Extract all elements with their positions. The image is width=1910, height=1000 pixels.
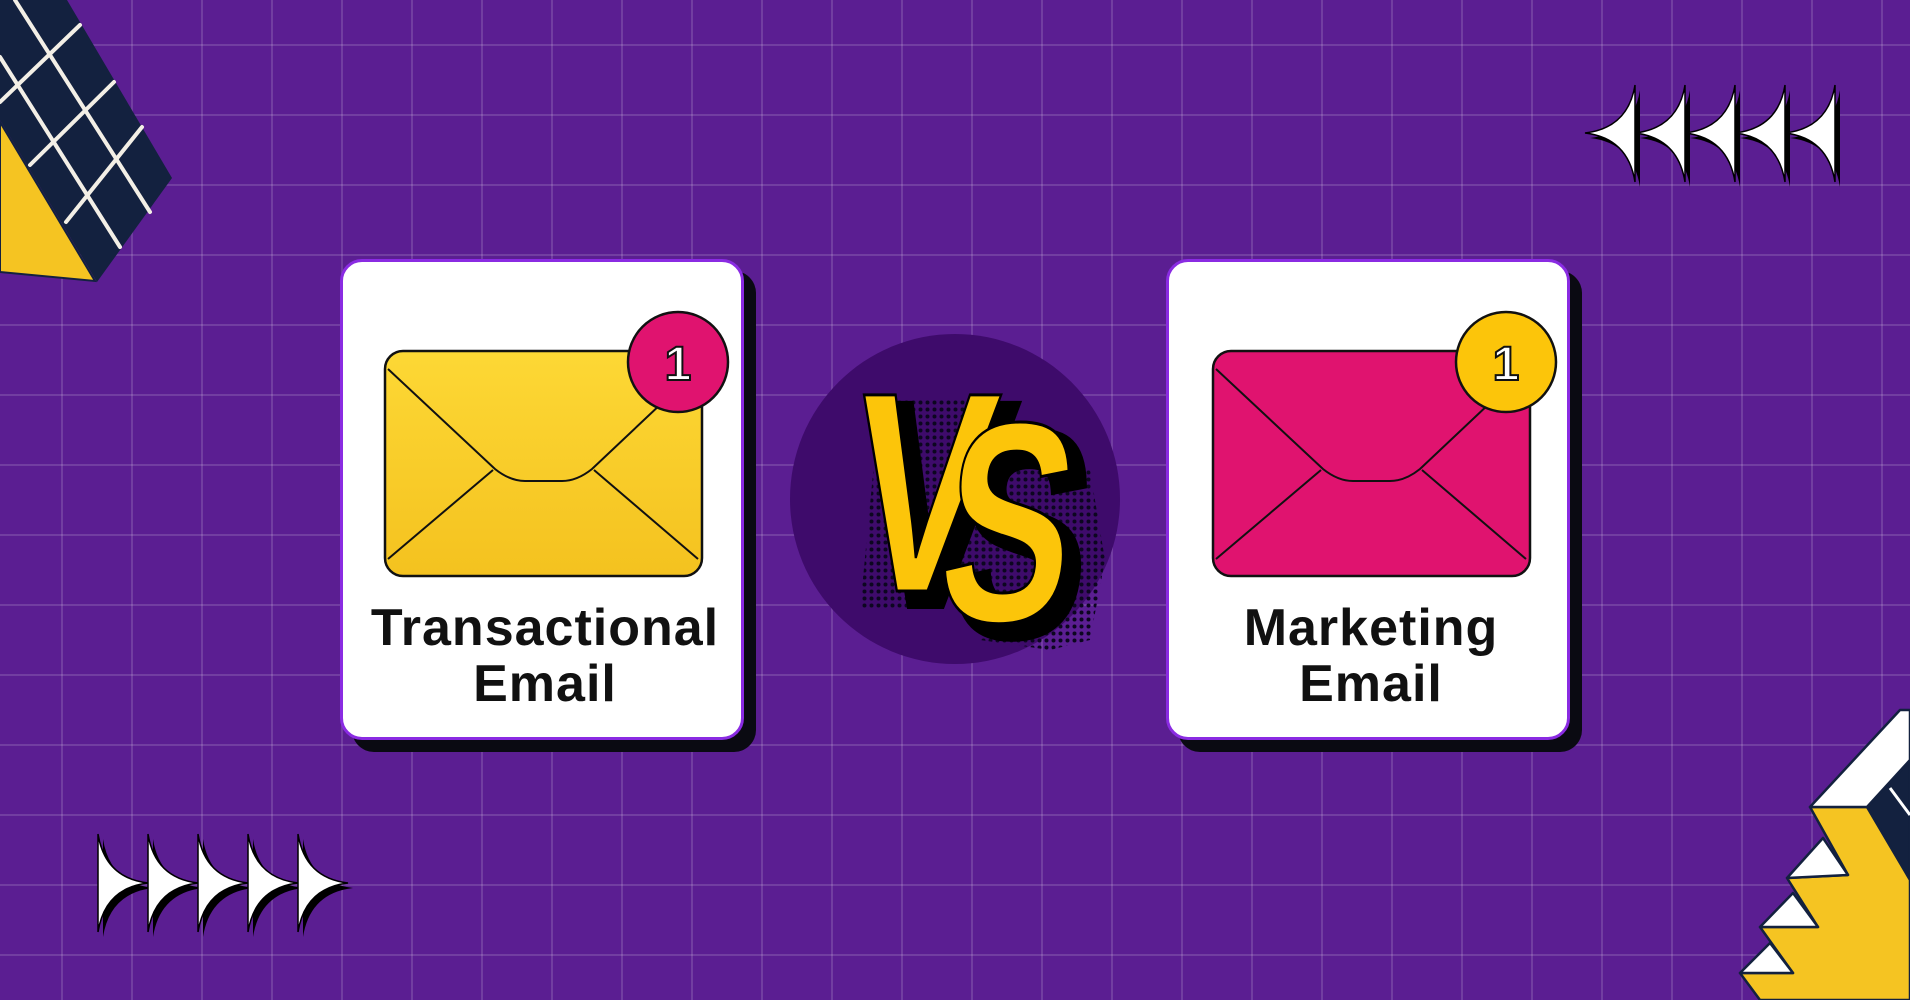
VS badge: V (836, 333, 1010, 652)
decoration: top-left shape (0, 0, 172, 282)
panel: transactional email card (340, 259, 744, 740)
heading: Transactional Email (371, 599, 719, 713)
icon: yellow envelope with badge: 1 (665, 338, 691, 391)
icon: yellow envelope with badge (384, 310, 730, 578)
icon: pink envelope with badge: 1 (1493, 338, 1519, 391)
heading: Transactional Email: Email (473, 655, 617, 713)
icon: pink envelope with badge (1212, 310, 1558, 578)
heading: Transactional Email: Transactional (371, 599, 719, 657)
VS badge: S (942, 375, 1105, 694)
VS badge: S (928, 363, 1091, 682)
panel: marketing email card (1166, 259, 1570, 740)
heading: Marketing Email (1244, 599, 1498, 713)
heading: Marketing Email: Email (1299, 655, 1443, 713)
VS badge: V (850, 345, 1024, 664)
heading: Marketing Email: Marketing (1244, 599, 1498, 657)
